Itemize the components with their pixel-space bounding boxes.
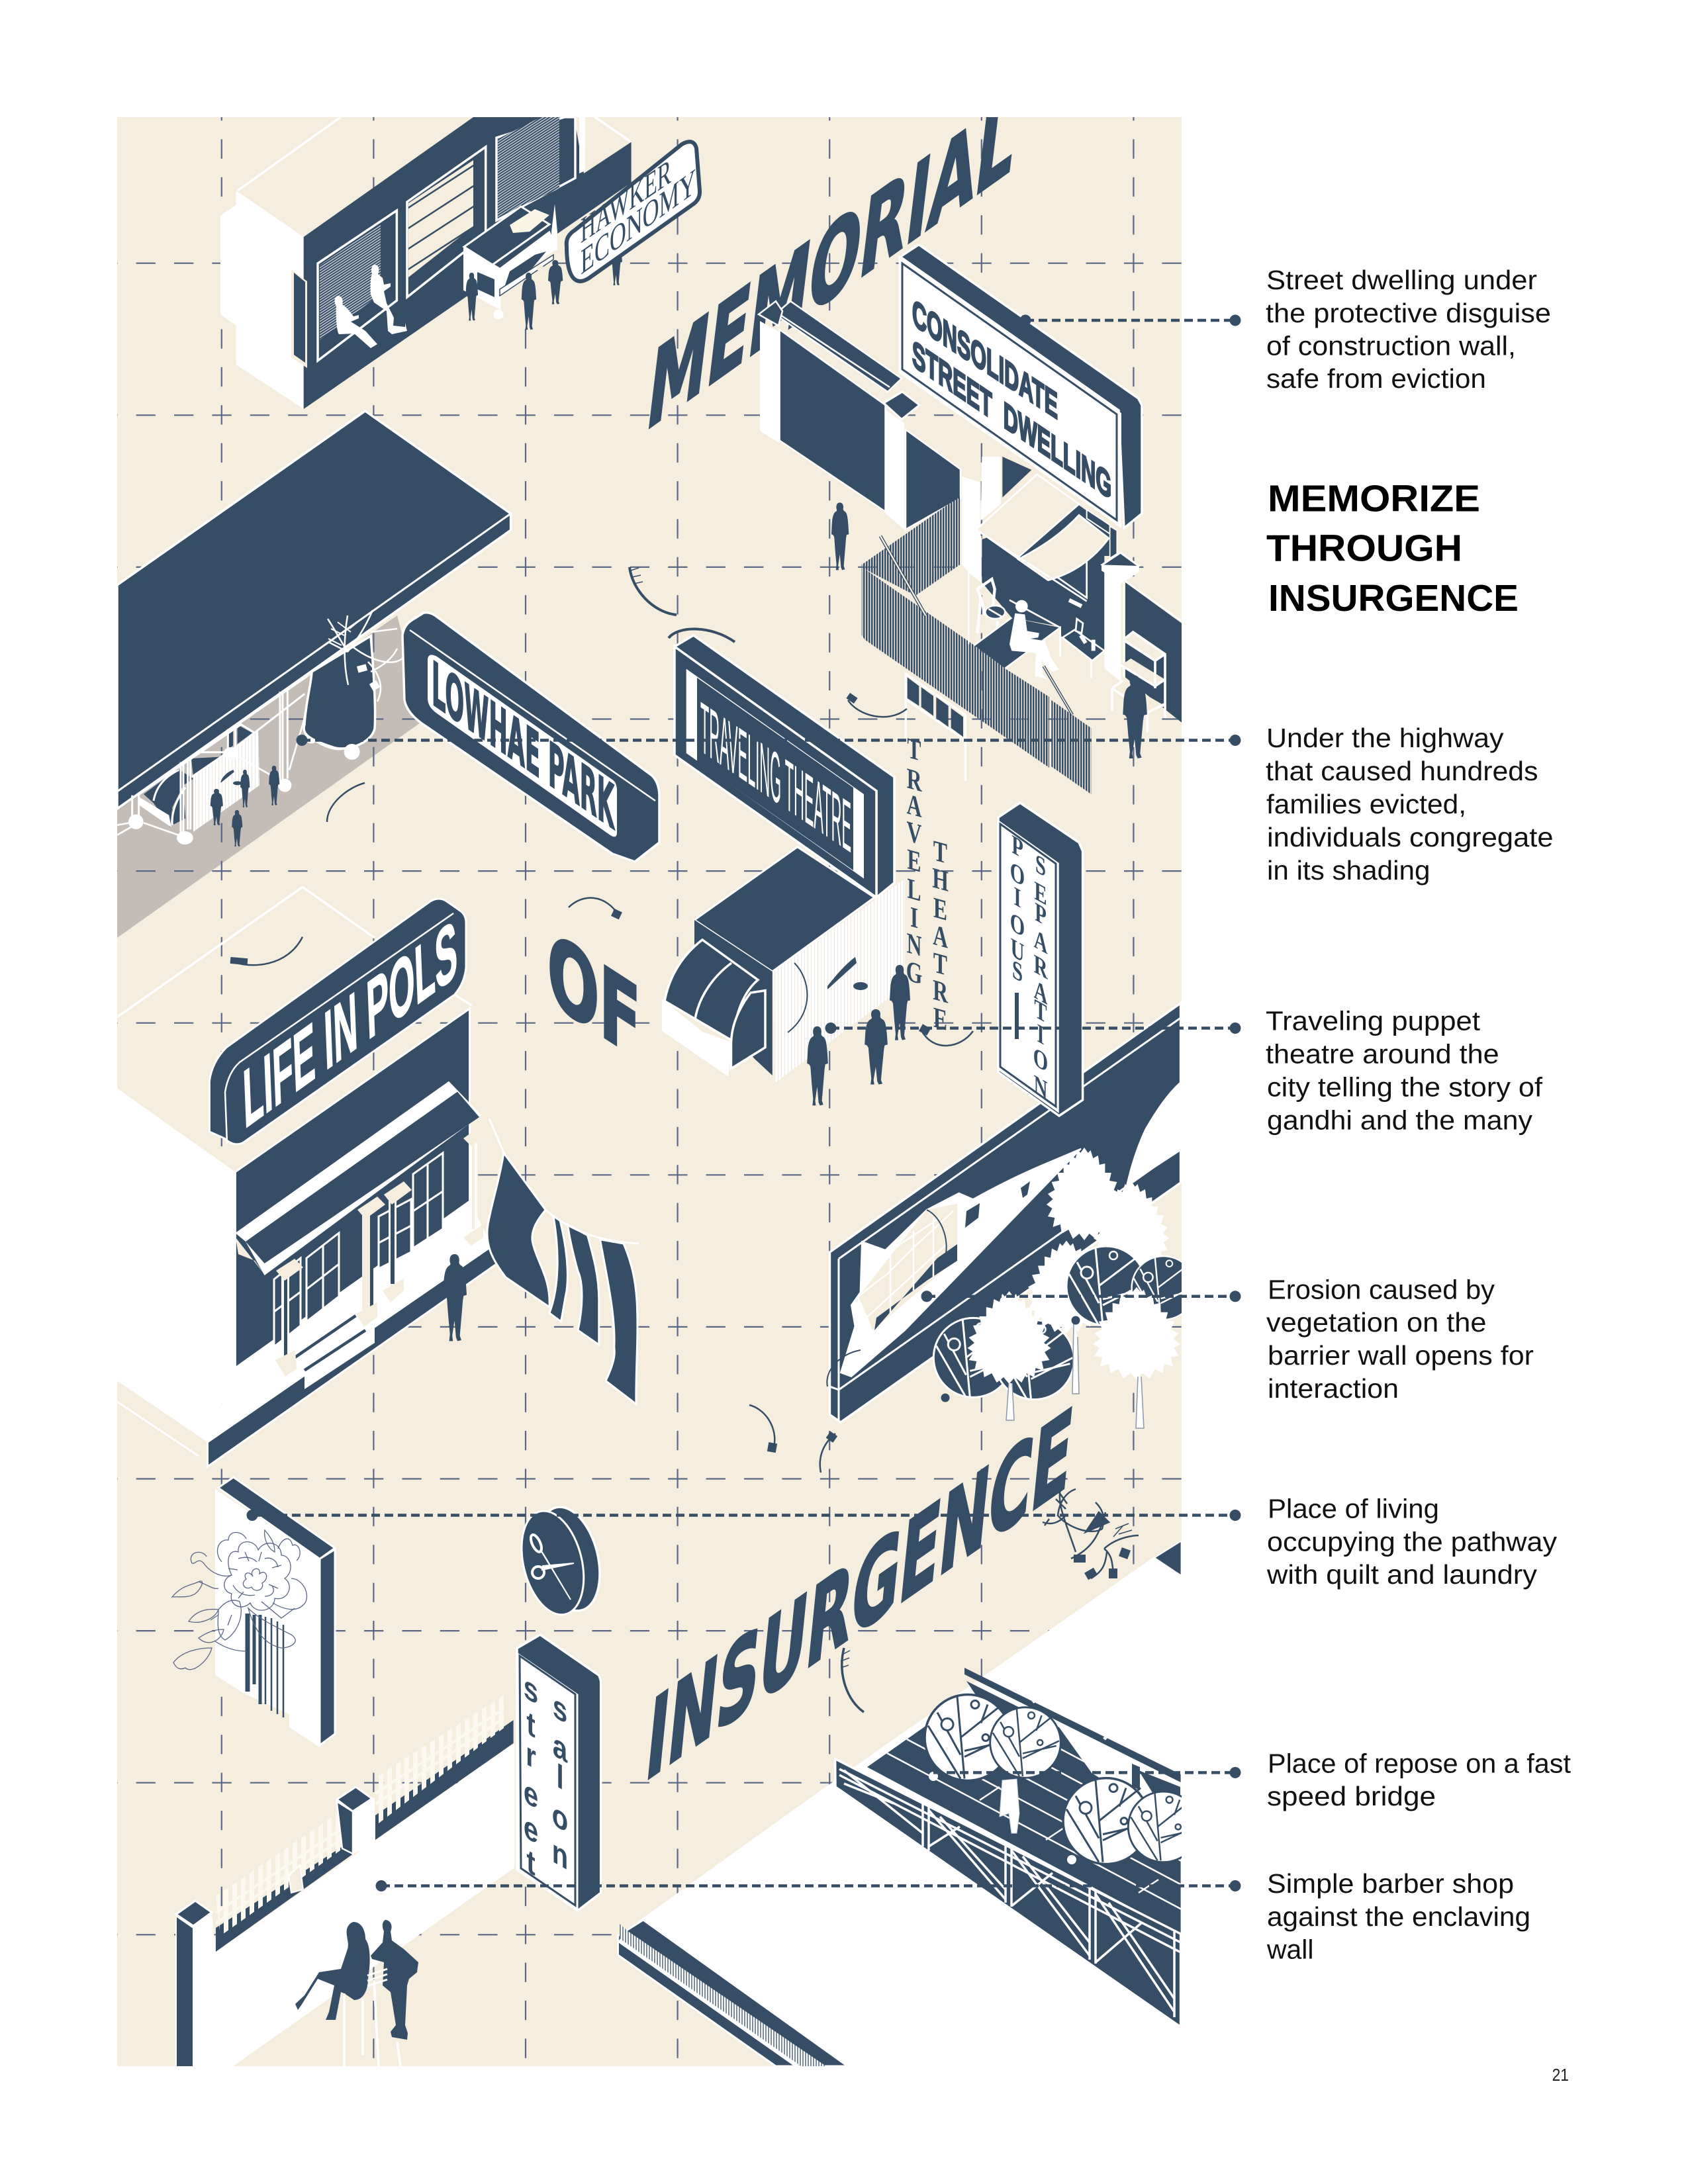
figures: two seated people in window xyxy=(335,265,407,348)
navy wedge at road edge xyxy=(1156,1542,1181,1574)
vertical lettering: theatre: THEATRE xyxy=(932,834,949,1038)
leader line: bridge xyxy=(933,1767,1241,1778)
caption: under the highway xyxy=(1266,723,1553,886)
scissors round sign xyxy=(512,1500,610,1621)
bridge deck with truss and trees xyxy=(835,1668,1199,2027)
fence screens around dwelling xyxy=(862,496,1091,794)
leader line: highway xyxy=(297,735,1241,746)
caption: traveling puppet theatre: Traveling puppet xyxy=(1266,1005,1481,1036)
caption: under the highway: in its shading xyxy=(1267,855,1430,886)
shophouse windows xyxy=(274,1153,443,1347)
white ground under bridge xyxy=(618,1539,1182,2068)
panel: isometric street illustration: LOWHAE PARK xyxy=(432,648,615,845)
panel: isometric street illustration: TRAVELING THEATRE xyxy=(700,687,851,868)
leader line: construction wall xyxy=(1019,315,1241,326)
banner: striped flag xyxy=(487,1118,639,1404)
caption: erosion: vegetation on the xyxy=(1266,1307,1487,1338)
caption: place of repose: speed bridge xyxy=(1267,1781,1436,1811)
caption: under the highway: that caused hundreds xyxy=(1266,756,1538,786)
caption: barber shop xyxy=(1266,1868,1530,1965)
caption: barber shop: Simple barber shop xyxy=(1267,1868,1514,1899)
sign: hawker economy xyxy=(567,142,700,283)
sign: street salon: salon xyxy=(552,1686,568,1878)
construction wall with pillars xyxy=(759,301,961,529)
caption: street dwelling xyxy=(1266,265,1551,394)
people watching theatre xyxy=(807,965,910,1105)
sign: street salon xyxy=(517,1635,601,1911)
people around cart xyxy=(466,257,622,330)
caption: traveling puppet theatre: city telling the story of xyxy=(1267,1071,1543,1102)
billboard: consolidate street dwelling: CONSOLIDATE xyxy=(912,291,1058,428)
silhouettes: seated woman and standing man on chair xyxy=(295,1920,418,2066)
sign: poious separation: POIOUS xyxy=(1010,827,1025,990)
caption: place of living: with quilt and laundry xyxy=(1266,1559,1538,1590)
caption: place of living: Place of living xyxy=(1268,1494,1439,1524)
billboard: consolidate street dwelling: STREET DWELLING xyxy=(912,332,1111,508)
sign: poious separation: SEPARATION xyxy=(1033,846,1048,1106)
street dwelling: room, awnings, table, shelf xyxy=(880,457,1182,781)
heading: memorize through insurgence: MEMORIZE xyxy=(1268,478,1480,520)
heading: memorize through insurgence: THROUGH xyxy=(1266,527,1462,570)
traveling theatre truck xyxy=(663,847,905,1083)
caption: traveling puppet theatre: gandhi and the many xyxy=(1267,1105,1533,1135)
heading: memorize through insurgence xyxy=(1266,478,1519,619)
sign: hawker economy: ECONOMY xyxy=(581,161,696,283)
food cart xyxy=(464,204,557,319)
caption: street dwelling: the protective disguise xyxy=(1266,298,1551,328)
wall with flower drawing and bars xyxy=(215,1477,335,1747)
caption: erosion: interaction xyxy=(1268,1373,1399,1404)
flower line drawing xyxy=(172,1530,306,1670)
caption: street dwelling: Street dwelling under xyxy=(1266,265,1537,295)
person at shophouse xyxy=(443,1254,467,1341)
caption: barber shop: against the enclaving xyxy=(1267,1901,1530,1932)
caption: street dwelling: of construction wall, xyxy=(1266,331,1516,361)
caption: place of repose: Place of repose on a fast xyxy=(1268,1748,1571,1778)
leader line: barber shop xyxy=(376,1880,1241,1891)
barrier wall with erosion xyxy=(827,1003,1181,1422)
leader line: erosion xyxy=(921,1291,1241,1302)
sign: lowhae park xyxy=(402,613,659,862)
caption: erosion: Erosion caused by xyxy=(1268,1274,1495,1304)
caption: place of repose xyxy=(1267,1748,1571,1811)
caption: traveling puppet theatre xyxy=(1266,1005,1543,1135)
person by shelf xyxy=(1123,676,1147,758)
highway slab xyxy=(117,411,511,809)
building: life in pols shophouse xyxy=(117,887,498,1467)
leader line: puppet theatre xyxy=(825,1023,1241,1034)
word: OF: OF xyxy=(547,910,641,1084)
gathering blob under highway with palm xyxy=(304,610,418,760)
vertical lettering: traveling: TRAVELING xyxy=(906,731,922,991)
shophouse awning xyxy=(235,1081,481,1275)
building: hawker economy shopfront xyxy=(220,117,632,409)
caption: street dwelling: safe from eviction xyxy=(1266,363,1486,394)
person walking by wall xyxy=(831,502,849,570)
road barrier with rail xyxy=(618,1920,848,2066)
small ribbon arcs scattered around xyxy=(230,567,973,1712)
caption: place of living xyxy=(1266,1494,1558,1590)
panel: isometric street illustration: LIFE IN POLS xyxy=(242,903,459,1146)
billboard: consolidate street dwelling xyxy=(900,245,1142,528)
caption: under the highway: individuals congregate xyxy=(1267,822,1553,852)
structures under highway xyxy=(117,675,342,844)
caption: erosion: barrier wall opens for xyxy=(1268,1340,1534,1371)
caption: under the highway: Under the highway xyxy=(1266,723,1504,753)
people under highway xyxy=(211,766,279,846)
page number: 21 xyxy=(1552,2066,1569,2085)
plant sketch near insurgence xyxy=(1043,1486,1139,1580)
hatched screen under highway xyxy=(193,730,259,832)
caption: barber shop: wall xyxy=(1266,1934,1313,1965)
enclaving wall with fence xyxy=(176,1695,514,2068)
sign: hawker economy: HAWKER xyxy=(581,150,671,251)
caption: erosion xyxy=(1266,1274,1534,1404)
word: INSURGENCE: INSURGENCE xyxy=(641,1383,1078,1809)
sign: street salon: street xyxy=(524,1668,538,1886)
caption: place of living: occupying the pathway xyxy=(1267,1526,1558,1557)
highway shade on ground xyxy=(117,615,424,938)
heading: memorize through insurgence: INSURGENCE xyxy=(1268,577,1519,619)
caption: traveling puppet theatre: theatre around the xyxy=(1266,1038,1499,1069)
caption: under the highway: families evicted, xyxy=(1266,789,1466,819)
leader line: place of living xyxy=(246,1510,1241,1521)
sign: traveling theatre xyxy=(675,635,894,897)
trees: jagged white crowns and round navy trees xyxy=(933,1148,1196,1428)
panel: isometric street illustration xyxy=(117,69,1199,2068)
shophouse columns xyxy=(275,1122,491,1377)
sign: life in pols xyxy=(209,899,466,1146)
sign: poious separation xyxy=(998,803,1083,1116)
